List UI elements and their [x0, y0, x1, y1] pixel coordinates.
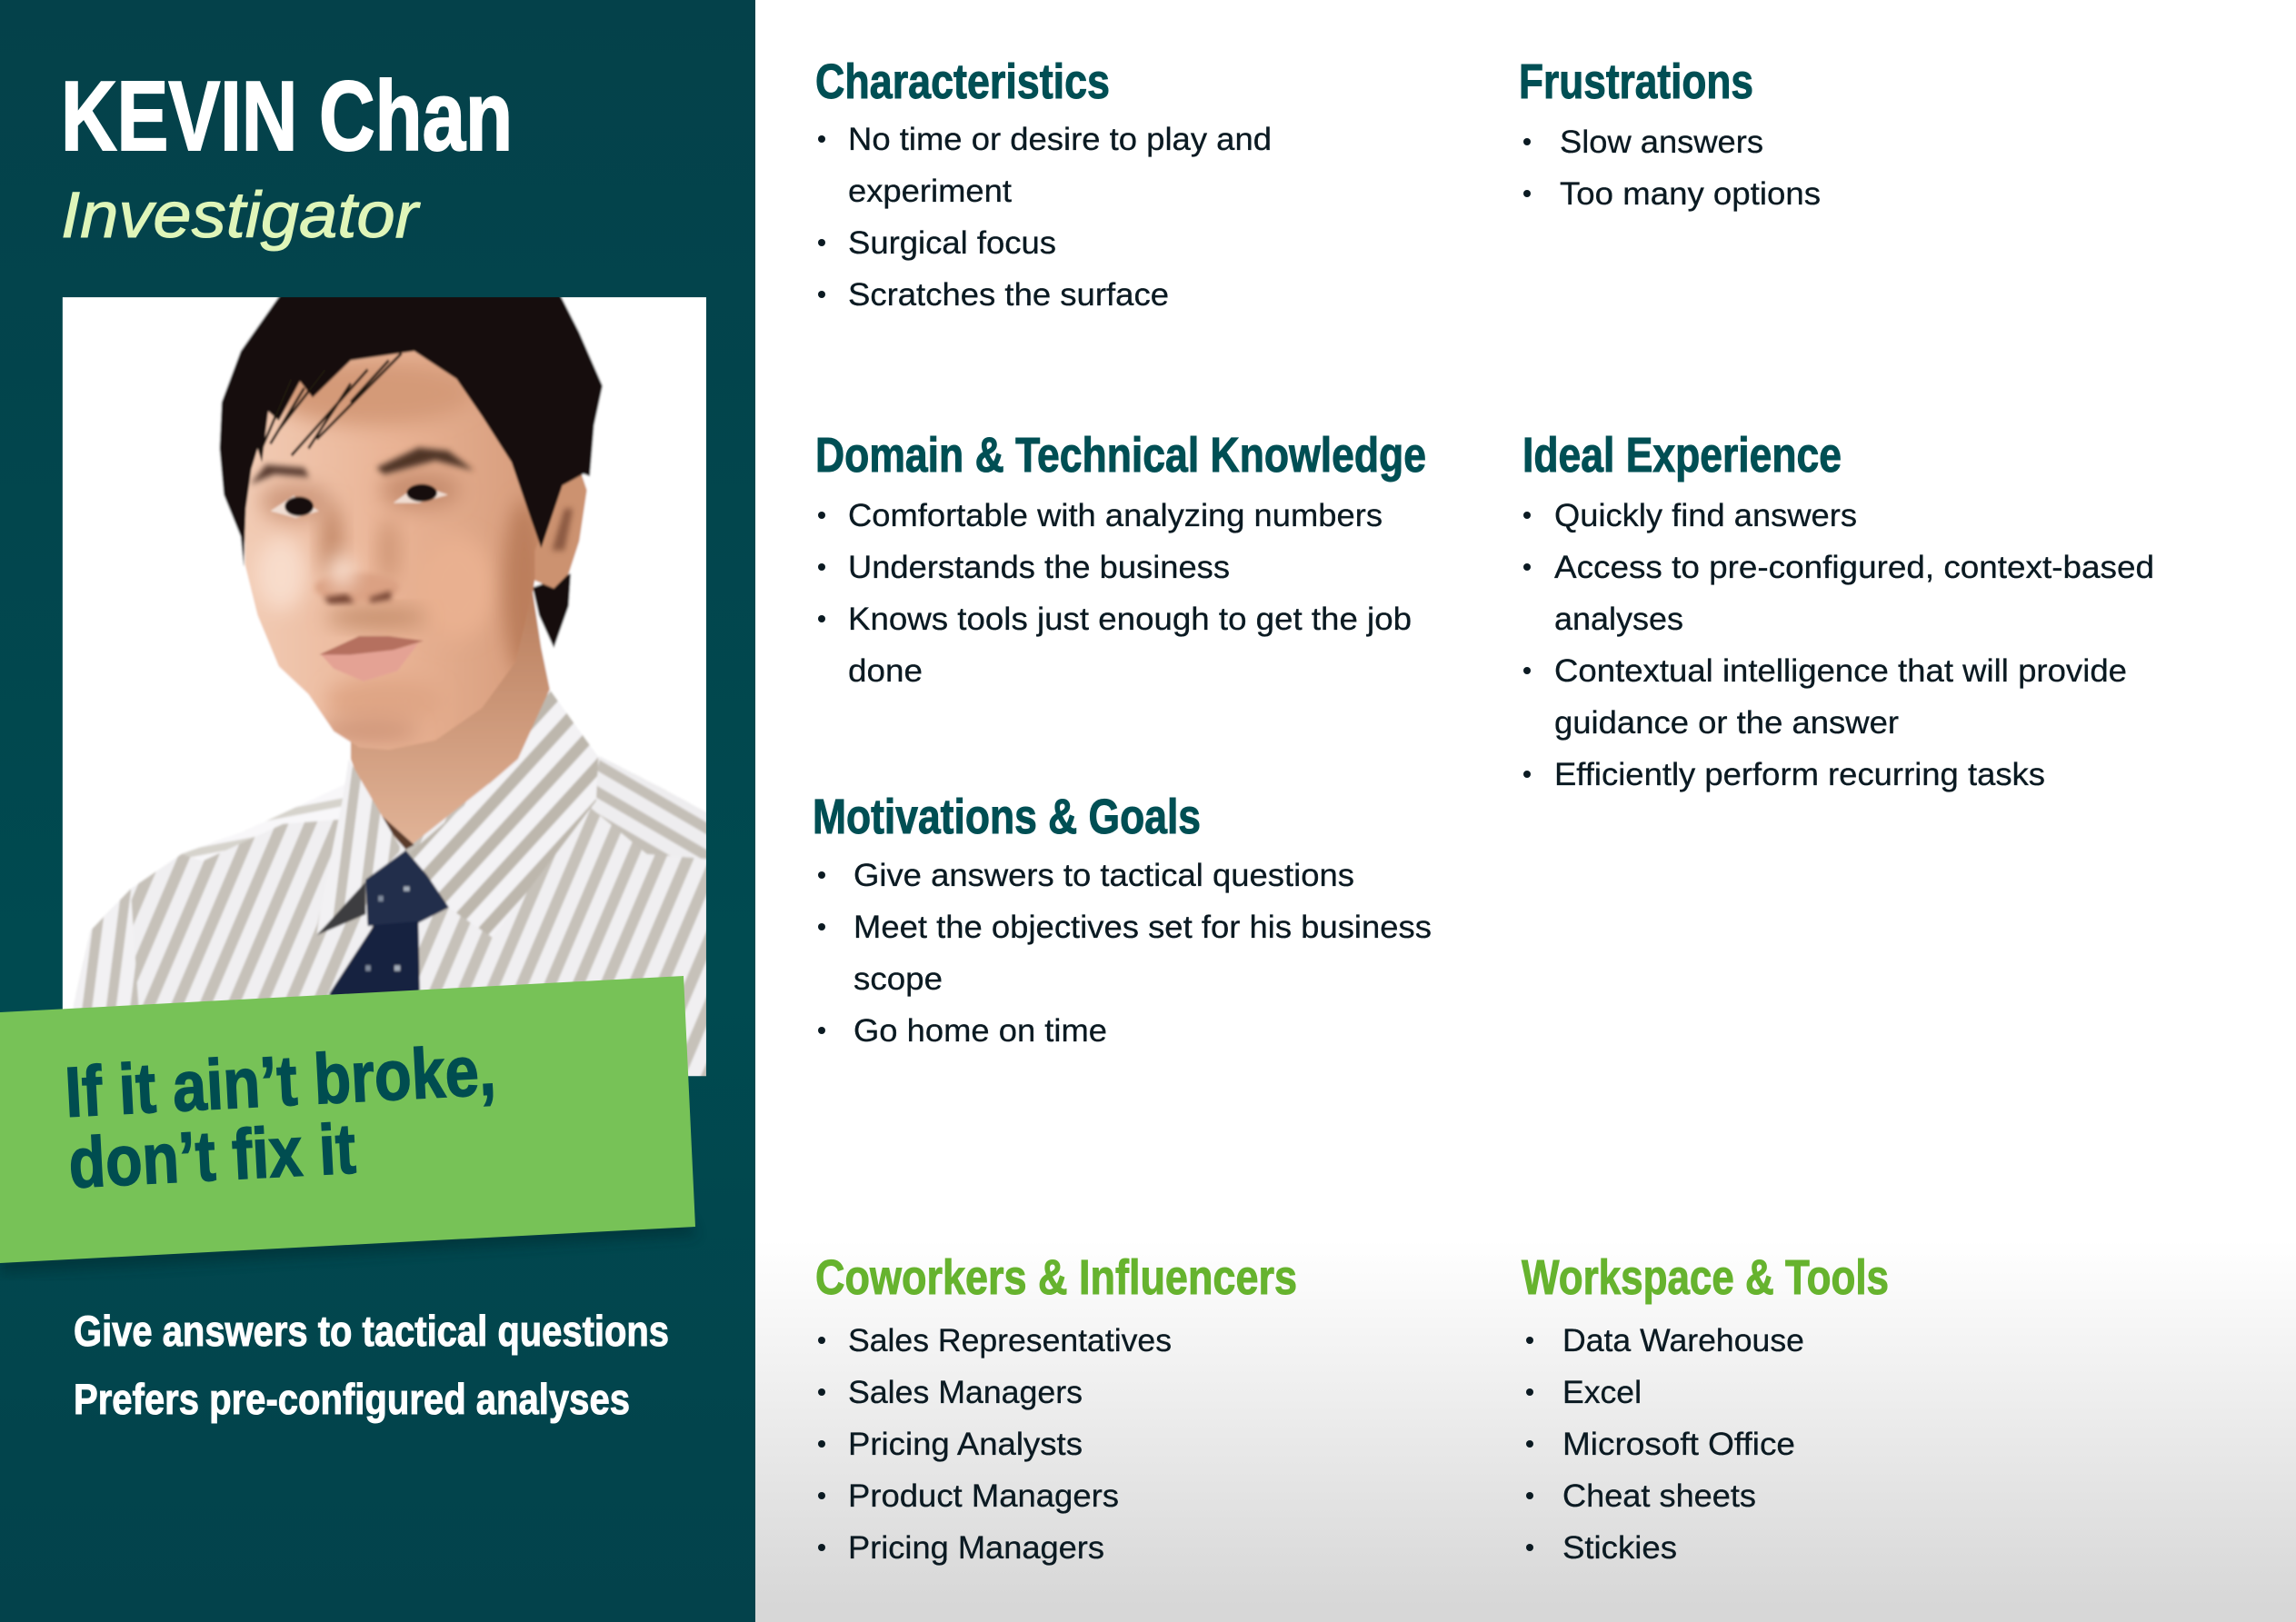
face	[243, 349, 541, 750]
hair	[220, 291, 603, 567]
mouth	[319, 636, 424, 655]
section: Ideal Experience: Ideal Experience	[1522, 428, 1842, 483]
section: Domain & Technical Knowledge	[815, 428, 1426, 689]
section: Ideal Experience	[1522, 428, 2154, 792]
left eye	[270, 496, 319, 518]
section: Motivations & Goals: Motivations & Goals	[813, 790, 1201, 844]
section: Frustrations	[1519, 55, 1821, 212]
section: Workspace & Tools: Microsoft Office	[1562, 1427, 1795, 1462]
callout: quote banner: don’t fix it	[66, 1109, 357, 1203]
section: Characteristics: Scratches the surface	[848, 277, 1169, 313]
right eye	[393, 490, 448, 505]
section: Domain & Technical Knowledge: Understands the business	[848, 550, 1230, 585]
panel: right background	[755, 0, 2296, 1622]
section: Characteristics: Surgical focus	[848, 225, 1056, 261]
quote text: If it ain’t broke,	[63, 1030, 497, 1132]
section: Domain & Technical Knowledge: done	[848, 653, 923, 689]
text block: key traits: Give answers to tactical questions	[74, 1307, 669, 1355]
section: Domain & Technical Knowledge: Comfortable with analyzing numbers	[848, 498, 1383, 533]
tie	[365, 851, 449, 926]
section: Workspace & Tools: Cheat sheets	[1562, 1478, 1756, 1514]
section: Domain & Technical Knowledge: Domain & Technical Knowledge	[815, 428, 1426, 483]
section: Motivations & Goals: Meet the objectives set for his business	[854, 910, 1432, 945]
section: Motivations & Goals: Give answers to tactical questions	[854, 858, 1354, 893]
callout: quote banner	[0, 976, 697, 1274]
section: Workspace & Tools	[1522, 1250, 1889, 1566]
text block: key traits: Prefers pre-configured analyses	[74, 1375, 630, 1423]
section: Ideal Experience: Efficiently perform recurring tasks	[1554, 757, 2045, 792]
section: Coworkers & Influencers: Sales Managers	[848, 1375, 1083, 1410]
section: Domain & Technical Knowledge: Knows tools just enough to get the job	[848, 602, 1412, 637]
section: Coworkers & Influencers: Product Managers	[848, 1478, 1119, 1514]
section: Ideal Experience: analyses	[1554, 602, 1683, 637]
panel: profile sidebar	[0, 0, 755, 1622]
section: Characteristics: Characteristics	[815, 55, 1110, 109]
photo: portrait of Kevin	[55, 291, 732, 1102]
neck	[351, 592, 552, 850]
section: Frustrations: Frustrations	[1519, 55, 1753, 109]
section: Ideal Experience: guidance or the answer	[1554, 705, 1899, 741]
text block: key traits	[74, 1307, 669, 1423]
nose	[314, 572, 399, 602]
section: Characteristics: experiment	[848, 174, 1012, 209]
section: Workspace & Tools: Workspace & Tools	[1522, 1250, 1889, 1305]
section: Coworkers & Influencers: Pricing Managers	[848, 1530, 1104, 1566]
section: Frustrations: Slow answers	[1560, 124, 1763, 160]
section: Coworkers & Influencers: Coworkers & Influencers	[815, 1250, 1297, 1305]
section: Coworkers & Influencers: Pricing Analysts	[848, 1427, 1083, 1462]
shirt body	[131, 758, 706, 1076]
title: persona name: KEVIN Chan	[61, 61, 513, 172]
section: Frustrations: Too many options	[1560, 176, 1821, 212]
section: Coworkers & Influencers	[815, 1250, 1297, 1566]
section: Motivations & Goals: Go home on time	[854, 1013, 1107, 1049]
ear	[534, 474, 587, 589]
subtitle: persona role: Investigator	[61, 180, 422, 252]
hair back	[533, 573, 571, 648]
section: Motivations & Goals: scope	[854, 961, 943, 997]
eyebrows	[250, 464, 309, 484]
hair strands on forehead	[260, 353, 402, 455]
section: Workspace & Tools: Stickies	[1562, 1530, 1677, 1566]
section: Workspace & Tools: Data Warehouse	[1562, 1323, 1804, 1358]
section: Coworkers & Influencers: Sales Representatives	[848, 1323, 1172, 1358]
section: Characteristics: No time or desire to play and	[848, 122, 1272, 157]
section: Motivations & Goals	[813, 790, 1432, 1049]
collar	[314, 759, 402, 936]
section: Workspace & Tools: Excel	[1562, 1375, 1642, 1410]
section: Ideal Experience: Access to pre-configured, context-based	[1554, 550, 2154, 585]
section: Ideal Experience: Contextual intelligence that will provide	[1554, 653, 2127, 689]
section: Characteristics	[815, 55, 1272, 313]
section: Ideal Experience: Quickly find answers	[1554, 498, 1857, 533]
